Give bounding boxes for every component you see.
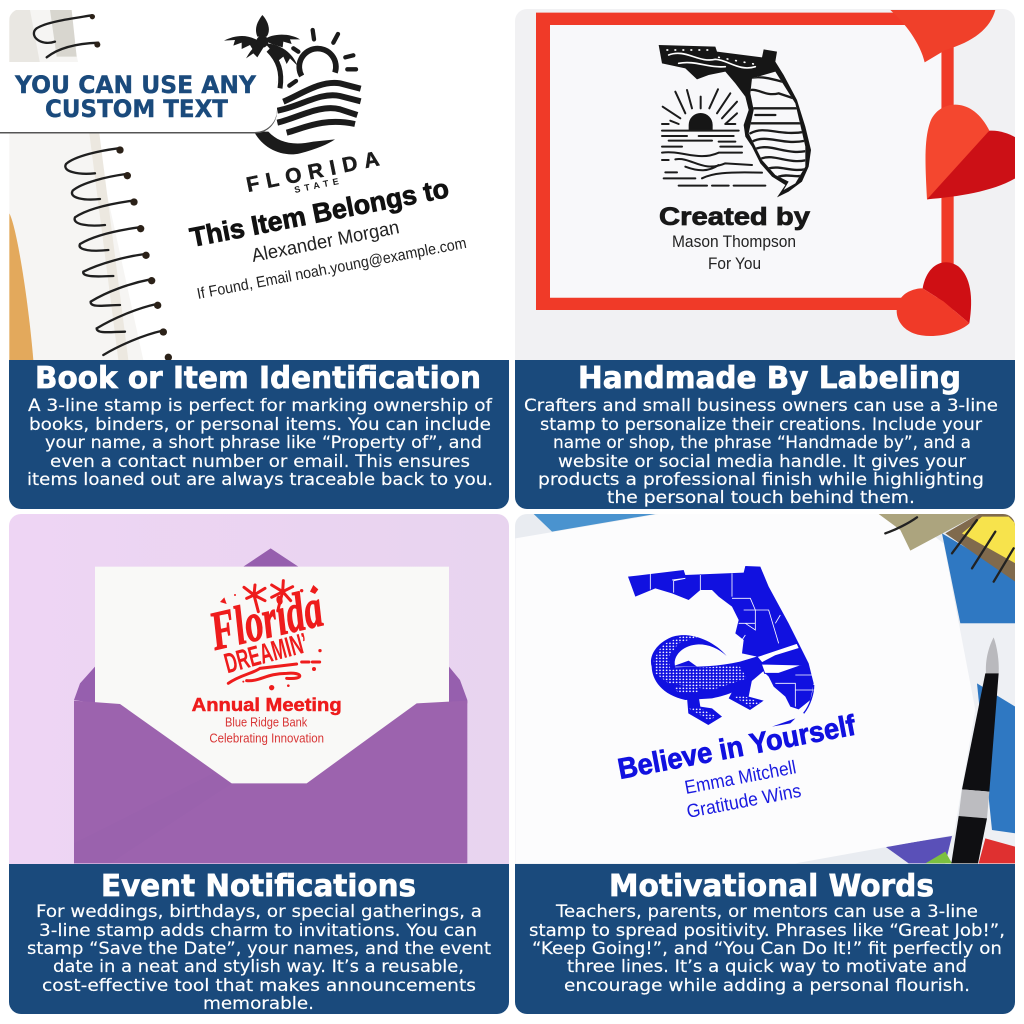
red frame xyxy=(536,13,954,310)
stamp logo: Florida Dreamin: Florida xyxy=(203,577,328,662)
panel: handmade by labeling xyxy=(515,9,1015,509)
pen xyxy=(951,637,999,863)
heading: Event Notifications xyxy=(101,869,416,904)
badge: you can use any custom text: CUSTOM TEXT xyxy=(45,95,229,123)
body text xyxy=(529,902,1005,996)
envelope back xyxy=(74,548,467,703)
stamp logo: Florida Dreamin xyxy=(210,579,324,690)
stamp text: name: Alexander Morgan xyxy=(250,217,401,267)
notebook coils xyxy=(34,15,163,355)
body text: date in a neat and stylish way. It’s a reusable, xyxy=(53,957,464,977)
stamp text: This Item Belongs to: This Item Belongs to xyxy=(187,173,451,253)
body text: encourage while adding a personal flourish. xyxy=(564,976,970,996)
stamp text: Florida State: STATE xyxy=(293,176,339,195)
body text: Crafters and small business owners can use a 3-line xyxy=(524,396,998,416)
heading: Motivational Words xyxy=(609,869,934,904)
body text: products a professional finish while highlighting xyxy=(538,470,984,490)
body text: even a contact number or email. This ensures xyxy=(50,452,470,472)
stamp text: Mason Thompson: Mason Thompson xyxy=(672,232,796,251)
body text xyxy=(27,902,491,1014)
caption: book or item identification xyxy=(9,360,509,509)
paper hearts xyxy=(890,10,1015,336)
stamp logo: Florida with alligator xyxy=(628,566,814,727)
envelope front xyxy=(74,701,467,863)
stamp text: Believe in Yourself: Believe in Yourself xyxy=(615,710,858,786)
body text: website or social media handle. It gives your xyxy=(558,452,966,472)
stamp text: For You: For You xyxy=(708,254,761,273)
paper sheet xyxy=(515,514,975,863)
body text: books, binders, or personal items. You can include xyxy=(29,415,491,435)
body text xyxy=(524,396,998,508)
stamp text: Created by: Created by xyxy=(659,203,810,231)
body text: Teachers, parents, or mentors can use a 3-line xyxy=(555,902,978,922)
stamp text: Blue Ridge Bank: Blue Ridge Bank xyxy=(225,715,308,730)
body text: name or shop, the phrase “Handmade by”, and a xyxy=(553,433,971,453)
stamp logo: Florida map with sunset xyxy=(659,45,812,197)
notebook xyxy=(879,514,1015,582)
stamp text: Florida State: FLORIDA xyxy=(244,147,381,197)
photo: purple envelope with card xyxy=(9,514,509,864)
alligator xyxy=(651,635,803,725)
body text: cost-effective tool that makes announcements xyxy=(42,976,476,996)
panel: book or item identification xyxy=(9,9,509,509)
photo: spiral notebook with stamp xyxy=(9,9,509,361)
stamp text: email: If Found, Email noah.young@example.com xyxy=(196,235,468,303)
body text: items loaned out are always traceable back to you. xyxy=(27,470,493,490)
body text: For weddings, birthdays, or special gatherings, a xyxy=(36,902,482,922)
heading: Book or Item Identification xyxy=(35,361,481,396)
body text: your name, a short phrase like “Property of”, and xyxy=(45,433,482,453)
badge: you can use any custom text xyxy=(0,62,277,134)
body text: stamp to personalize their creations. Include your xyxy=(540,415,982,435)
body text: three lines. It’s a quick way to motivate and xyxy=(567,957,967,977)
stamp text: Gratitude Wins: Gratitude Wins xyxy=(685,781,803,823)
body text: 3-line stamp adds charm to invitations. You can xyxy=(39,921,477,941)
photo: desk with paper, pen and notebook xyxy=(515,514,1015,864)
body text: A 3-line stamp is perfect for marking ownership of xyxy=(28,396,493,416)
stamp logo: Florida Dreamin: DREAMIN’ xyxy=(221,627,311,680)
body text: memorable. xyxy=(203,994,314,1014)
body text: stamp to spread positivity. Phrases like “Great Job!”, xyxy=(529,921,1005,941)
body text: “Keep Going!”, and “You Can Do It!” fit perfectly on xyxy=(532,939,1002,959)
photo: red frame with paper hearts xyxy=(515,9,1015,360)
caption: motivational words xyxy=(515,864,1015,1014)
body text: the personal touch behind them. xyxy=(607,488,915,508)
badge: you can use any custom text: YOU CAN USE ANY xyxy=(14,71,257,99)
body text: stamp “Save the Date”, your names, and the event xyxy=(27,939,491,959)
caption: event notifications xyxy=(9,864,509,1014)
caption: handmade by labeling xyxy=(515,360,1015,509)
panel: motivational words xyxy=(515,514,1015,1014)
panel: event notifications xyxy=(9,514,509,1014)
stamp text: Annual Meeting: Annual Meeting xyxy=(192,694,342,715)
heading: Handmade By Labeling xyxy=(578,361,961,396)
stamp text: Emma Mitchell: Emma Mitchell xyxy=(683,757,798,799)
stamp logo: palm, sun and waves xyxy=(224,15,361,154)
card xyxy=(95,567,449,793)
stamp text: Celebrating Innovation: Celebrating Innovation xyxy=(209,731,324,746)
body text xyxy=(27,396,493,490)
